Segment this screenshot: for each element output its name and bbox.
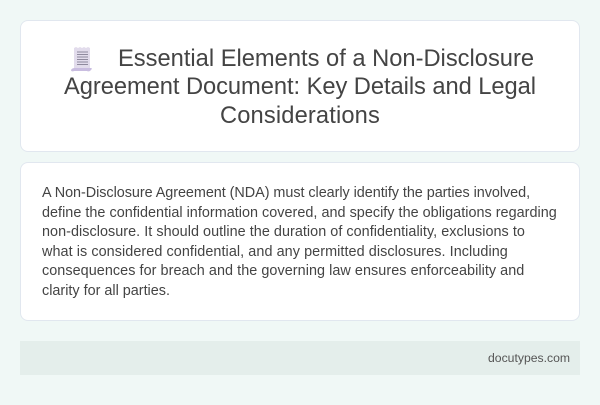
footer bar [20,341,580,375]
text block: description: clarity for all parties. [42,283,170,299]
heading: Essential Elements of a Non-Disclosure [118,46,534,72]
heading: Agreement Document: Key Details and Legal [64,74,536,100]
text block: description: consequences for breach and the governing law ensures enforceability and [42,263,524,279]
heading [64,46,536,129]
text block: description: non-disclosure. It should outline the duration of confidentiality, exclusions to [42,224,525,240]
panel: title card [20,20,580,152]
text block: description: define the confidential information covered, and specify the obligations regarding [42,205,557,221]
icon: document scroll [71,47,92,72]
footer text: site name: docutypes.com [488,351,570,365]
text block: description [42,185,557,299]
panel: description card [20,162,580,321]
text block: description: what is considered confidential, and any permitted disclosures. Including [42,244,508,260]
heading: Considerations [220,103,380,129]
text block: description: A Non-Disclosure Agreement (NDA) must clearly identify the parties involved, [42,185,530,201]
